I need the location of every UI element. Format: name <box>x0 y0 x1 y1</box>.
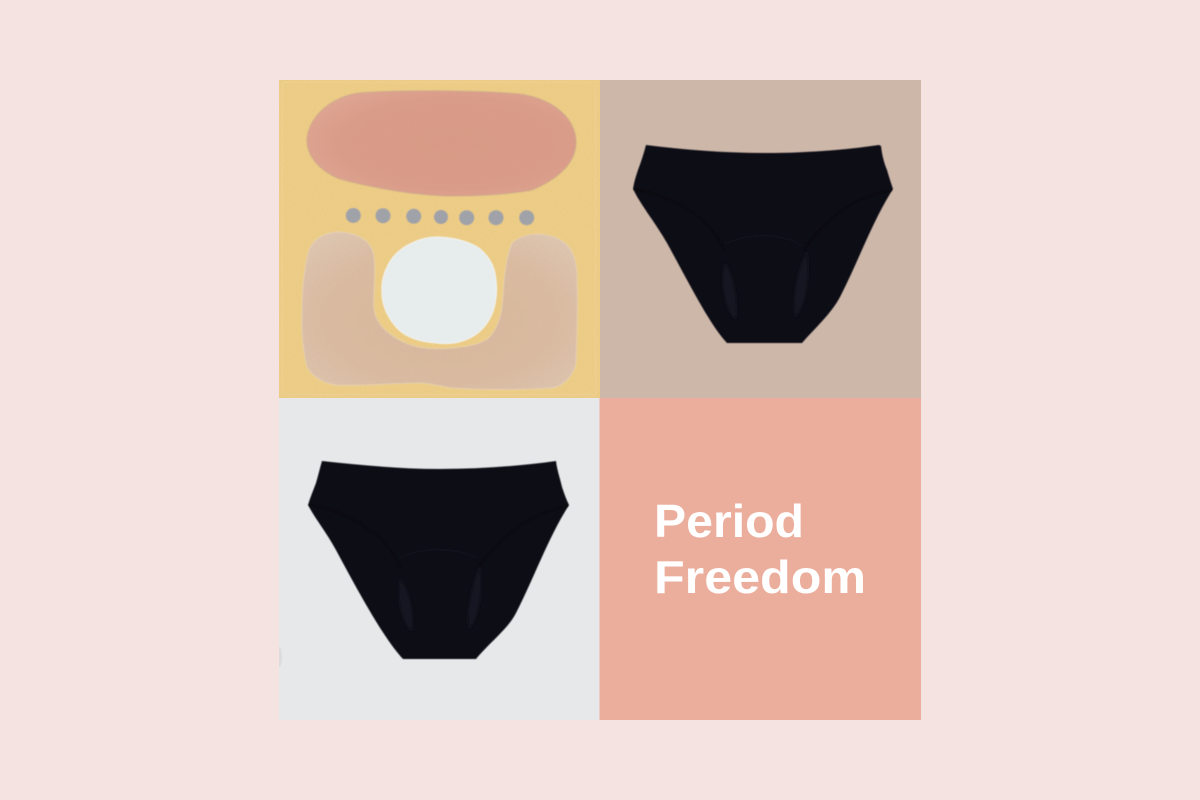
infographic canvas <box>279 80 921 720</box>
panel: abstract painting <box>279 80 600 398</box>
title <box>654 495 866 603</box>
painting: pink oval <box>307 91 576 196</box>
painting: canvas grain <box>279 80 600 398</box>
panel: taupe product <box>600 80 921 398</box>
painting: row of grey dots <box>346 208 534 225</box>
panel: grey product <box>276 398 600 720</box>
product: black briefs <box>308 461 569 659</box>
product: black briefs <box>633 145 893 343</box>
painting: sand U shape <box>302 232 577 390</box>
detail: leg seams <box>309 505 568 567</box>
detail: leg seams <box>634 189 892 250</box>
painting: white circle <box>382 237 497 344</box>
detail: lace side panels <box>723 250 808 320</box>
detail: gusset seam <box>400 550 477 558</box>
title: Period <box>654 495 804 547</box>
detail: gusset seam <box>724 236 803 246</box>
detail: lace side panels <box>399 565 481 632</box>
title: Freedom <box>654 551 866 603</box>
panel: coral title <box>600 398 921 720</box>
